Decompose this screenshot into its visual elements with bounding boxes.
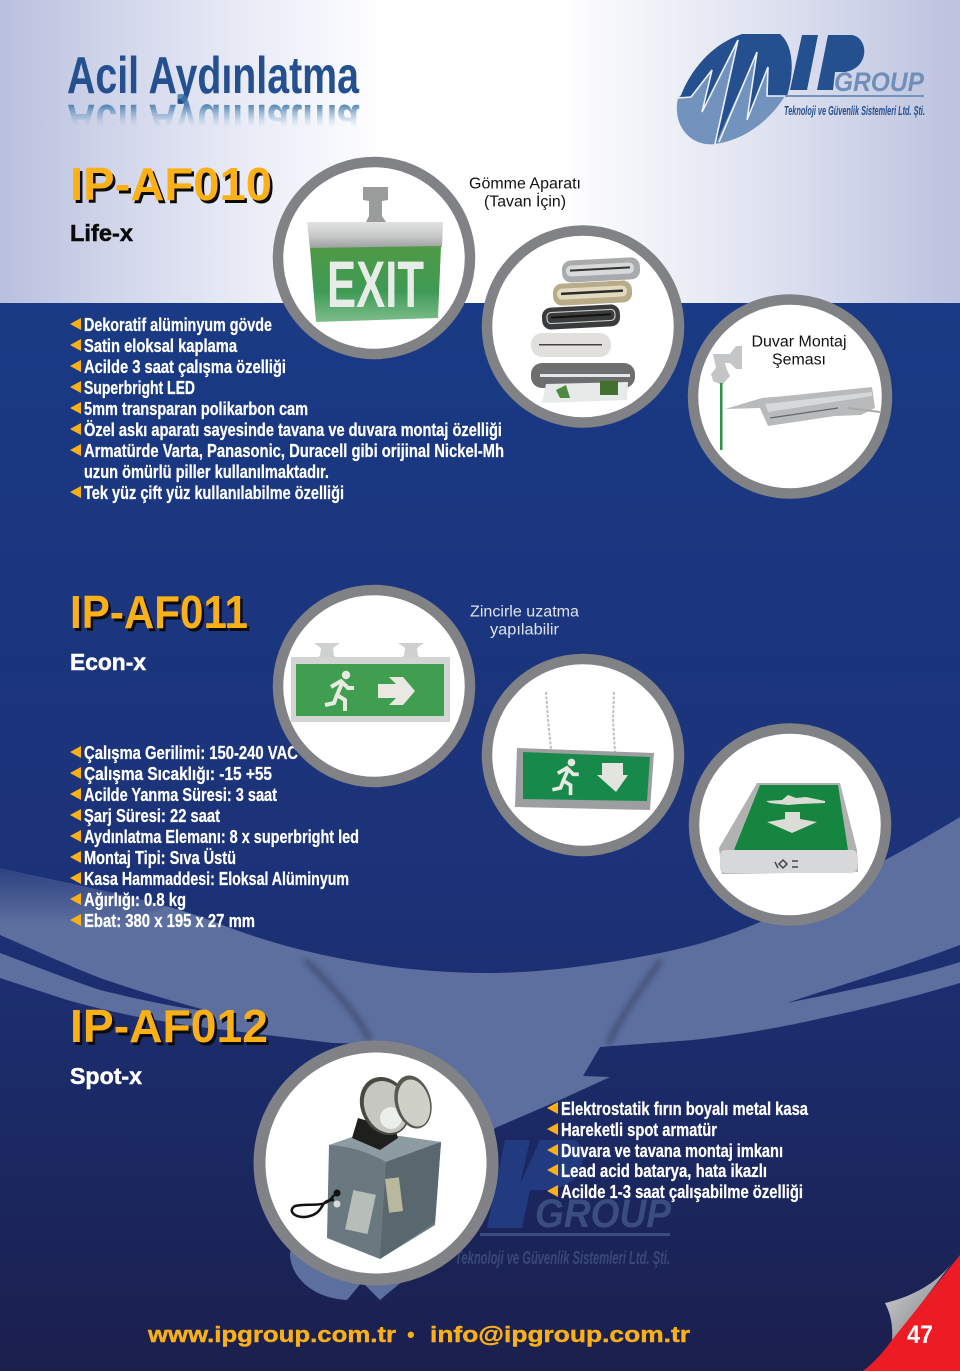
watermark logo: GROUP bbox=[535, 1192, 671, 1236]
feature list: IP-AF012: Lead acid batarya, hata ikazlı bbox=[561, 1161, 767, 1181]
caption: Zincirle uzatma: yapılabilir bbox=[490, 622, 559, 638]
subtitle: Spot-x: Spot-x bbox=[70, 1063, 142, 1089]
panel: IP-AF012 heading: IP-AF012 bbox=[70, 1000, 268, 1052]
photo circle: EXIT sign: EXIT bbox=[327, 247, 424, 321]
page background: dark blue lower section bbox=[0, 303, 960, 1371]
watermark logo: Teknoloji ve Güvenlik Sistemleri Ltd. Şti. bbox=[455, 1248, 670, 1268]
photo circle: EXIT sign bbox=[278, 162, 470, 354]
photo circle: floor sign bbox=[694, 728, 886, 920]
caption: Gömme Aparatı: (Tavan İçin) bbox=[484, 192, 566, 210]
panel: IP-AF011 heading: IP-AF011 bbox=[72, 589, 250, 641]
photo circle: wall mount diagram: Duvar Montaj bbox=[752, 334, 846, 350]
photo circle: wall mount diagram: Şeması bbox=[772, 352, 826, 368]
feature list: IP-AF011: Montaj Tipi: Sıva Üstü bbox=[84, 848, 236, 868]
feature list: IP-AF011: Ağırlığı: 0.8 kg bbox=[84, 890, 186, 910]
panel: IP-AF012 heading: IP-AF012 bbox=[72, 1003, 270, 1055]
feature list: IP-AF010: Özel askı aparatı sayesinde tavana ve duvara montaj özelliği bbox=[84, 420, 502, 440]
feature list: IP-AF010: Armatürde Varta, Panasonic, Duracell gibi orijinal Nickel-Mh bbox=[84, 441, 504, 461]
title bbox=[67, 47, 360, 151]
feature list: IP-AF011: Çalışma Gerilimi: 150-240 VAC bbox=[84, 743, 298, 763]
panel: IP-AF010 heading: IP-AF010 bbox=[70, 158, 272, 210]
page corner with page number bbox=[863, 1255, 960, 1371]
logo: IP Group: GROUP bbox=[834, 67, 925, 97]
photo circle: Econ-x sign with arrow bbox=[278, 590, 470, 782]
feature list: IP-AF012: Acilde 1-3 saat çalışabilme özelliği bbox=[561, 1182, 803, 1202]
feature list: IP-AF010: Tek yüz çift yüz kullanılabilme özelliği bbox=[84, 483, 344, 503]
page corner with page number: 47 bbox=[907, 1321, 933, 1349]
caption: Zincirle uzatma: Zincirle uzatma bbox=[470, 604, 579, 620]
footer contact line: www.ipgroup.com.tr bbox=[147, 1322, 396, 1347]
caption: Gömme Aparatı: Gömme Aparatı bbox=[469, 176, 581, 192]
photo circle: wall mount diagram bbox=[693, 300, 887, 494]
background swoosh bbox=[0, 817, 960, 1300]
photo circle: chain-hung sign bbox=[487, 659, 679, 851]
footer contact line bbox=[147, 1322, 691, 1347]
feature list: IP-AF010 bbox=[70, 315, 504, 503]
feature list: IP-AF011: Kasa Hammaddesi: Eloksal Alüminyum bbox=[84, 869, 349, 889]
footer contact line: info@ipgroup.com.tr bbox=[430, 1322, 691, 1347]
feature list: IP-AF010: Satin eloksal kaplama bbox=[84, 336, 238, 356]
page background: light gradient header bbox=[0, 0, 960, 303]
caption: Gömme Aparatı bbox=[469, 176, 581, 210]
photo circle: recessed mounting brackets bbox=[487, 230, 679, 422]
feature list: IP-AF010: Superbright LED bbox=[84, 378, 195, 398]
feature list: IP-AF011: Şarj Süresi: 22 saat bbox=[84, 806, 220, 826]
feature list: IP-AF010: 5mm transparan polikarbon cam bbox=[84, 399, 308, 419]
feature list: IP-AF011 bbox=[70, 743, 359, 931]
footer contact line: • bbox=[407, 1322, 415, 1347]
feature list: IP-AF012: Elektrostatik fırın boyalı metal kasa bbox=[561, 1099, 809, 1119]
logo: IP Group bbox=[677, 34, 925, 144]
feature list: IP-AF010: Acilde 3 saat çalışma özelliği bbox=[84, 357, 286, 377]
feature list: IP-AF010: Dekoratif alüminyum gövde bbox=[84, 315, 272, 335]
caption: Zincirle uzatma bbox=[470, 604, 579, 638]
feature list: IP-AF012: Duvara ve tavana montaj imkanı bbox=[561, 1141, 783, 1161]
feature list: IP-AF011: Acilde Yanma Süresi: 3 saat bbox=[84, 785, 277, 805]
feature list: IP-AF012 bbox=[547, 1099, 809, 1202]
feature list: IP-AF010: uzun ömürlü piller kullanılmaktadır. bbox=[84, 462, 329, 482]
feature list: IP-AF011: Çalışma Sıcaklığı: -15 +55 bbox=[84, 764, 272, 784]
title: Acil Aydınlatma bbox=[67, 47, 360, 105]
watermark logo bbox=[455, 1140, 671, 1268]
subtitle: Econ-x: Econ-x bbox=[70, 649, 146, 675]
panel: IP-AF011 heading: IP-AF011 bbox=[70, 586, 248, 638]
feature list: IP-AF011: Aydınlatma Elemanı: 8 x superbright led bbox=[84, 827, 359, 847]
panel: IP-AF010 heading: IP-AF010 bbox=[72, 161, 274, 213]
feature list: IP-AF011: Ebat: 380 x 195 x 27 mm bbox=[84, 911, 255, 931]
subtitle: Life-x: Life-x bbox=[70, 220, 133, 246]
title: Acil Aydınlatma bbox=[67, 93, 360, 151]
photo circle: Spot-x twin lamp unit bbox=[260, 1046, 492, 1280]
feature list: IP-AF012: Hareketli spot armatür bbox=[561, 1120, 717, 1140]
